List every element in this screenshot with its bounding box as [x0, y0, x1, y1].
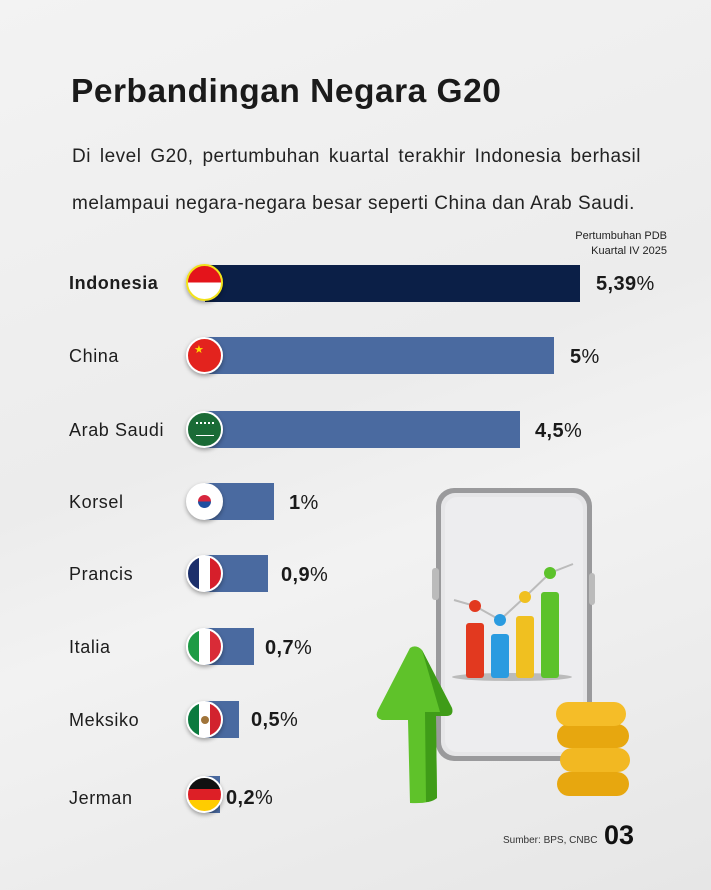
- row: China: China: [69, 346, 119, 366]
- row: Korsel: Korsel: [69, 492, 124, 512]
- page number: 03: [604, 820, 634, 850]
- row: Prancis: Prancis: [69, 564, 133, 584]
- row: Jerman: Jerman: [69, 788, 133, 808]
- row: Meksiko: 0,5%: [251, 709, 298, 731]
- row: Jerman: [69, 776, 273, 818]
- row: Italia: [69, 628, 312, 670]
- row: Meksiko: [69, 700, 298, 742]
- legend label: [575, 230, 667, 257]
- legend label: Pertumbuhan PDB: [575, 230, 667, 242]
- row: China: [69, 336, 600, 378]
- row: Prancis: 0,9%: [281, 564, 328, 586]
- row: China: 5%: [570, 346, 600, 368]
- row: Indonesia: Indonesia: [69, 273, 158, 293]
- illustration: phone with chart, arrow and coins: [376, 488, 630, 804]
- row: Arab Saudi: 4,5%: [535, 420, 582, 442]
- row: Indonesia: [69, 264, 655, 306]
- source: Sumber: BPS, CNBC: [503, 835, 597, 846]
- title: Perbandingan Negara G20: [71, 73, 501, 110]
- legend label: Kuartal IV 2025: [591, 245, 667, 257]
- arrow: [377, 646, 452, 803]
- phone: [432, 488, 595, 761]
- subtitle text: melampaui negara-negara besar seperti China dan Arab Saudi.: [72, 193, 635, 214]
- coins: [556, 702, 630, 796]
- row: Jerman: 0,2%: [226, 787, 273, 809]
- subtitle text: Di level G20, pertumbuhan kuartal terakhir Indonesia berhasil: [72, 146, 641, 167]
- row: Arab Saudi: Arab Saudi: [69, 420, 164, 440]
- row: Italia: Italia: [69, 637, 111, 657]
- row: Indonesia: 5,39%: [596, 273, 655, 295]
- row: Korsel: 1%: [289, 492, 319, 514]
- row: Meksiko: Meksiko: [69, 710, 139, 730]
- row: Korsel: [69, 482, 319, 524]
- subtitle text: [72, 146, 641, 214]
- row: Arab Saudi: [69, 410, 582, 452]
- row: China: ★: [194, 344, 204, 356]
- row: Prancis: [69, 554, 328, 596]
- row: Italia: 0,7%: [265, 637, 312, 659]
